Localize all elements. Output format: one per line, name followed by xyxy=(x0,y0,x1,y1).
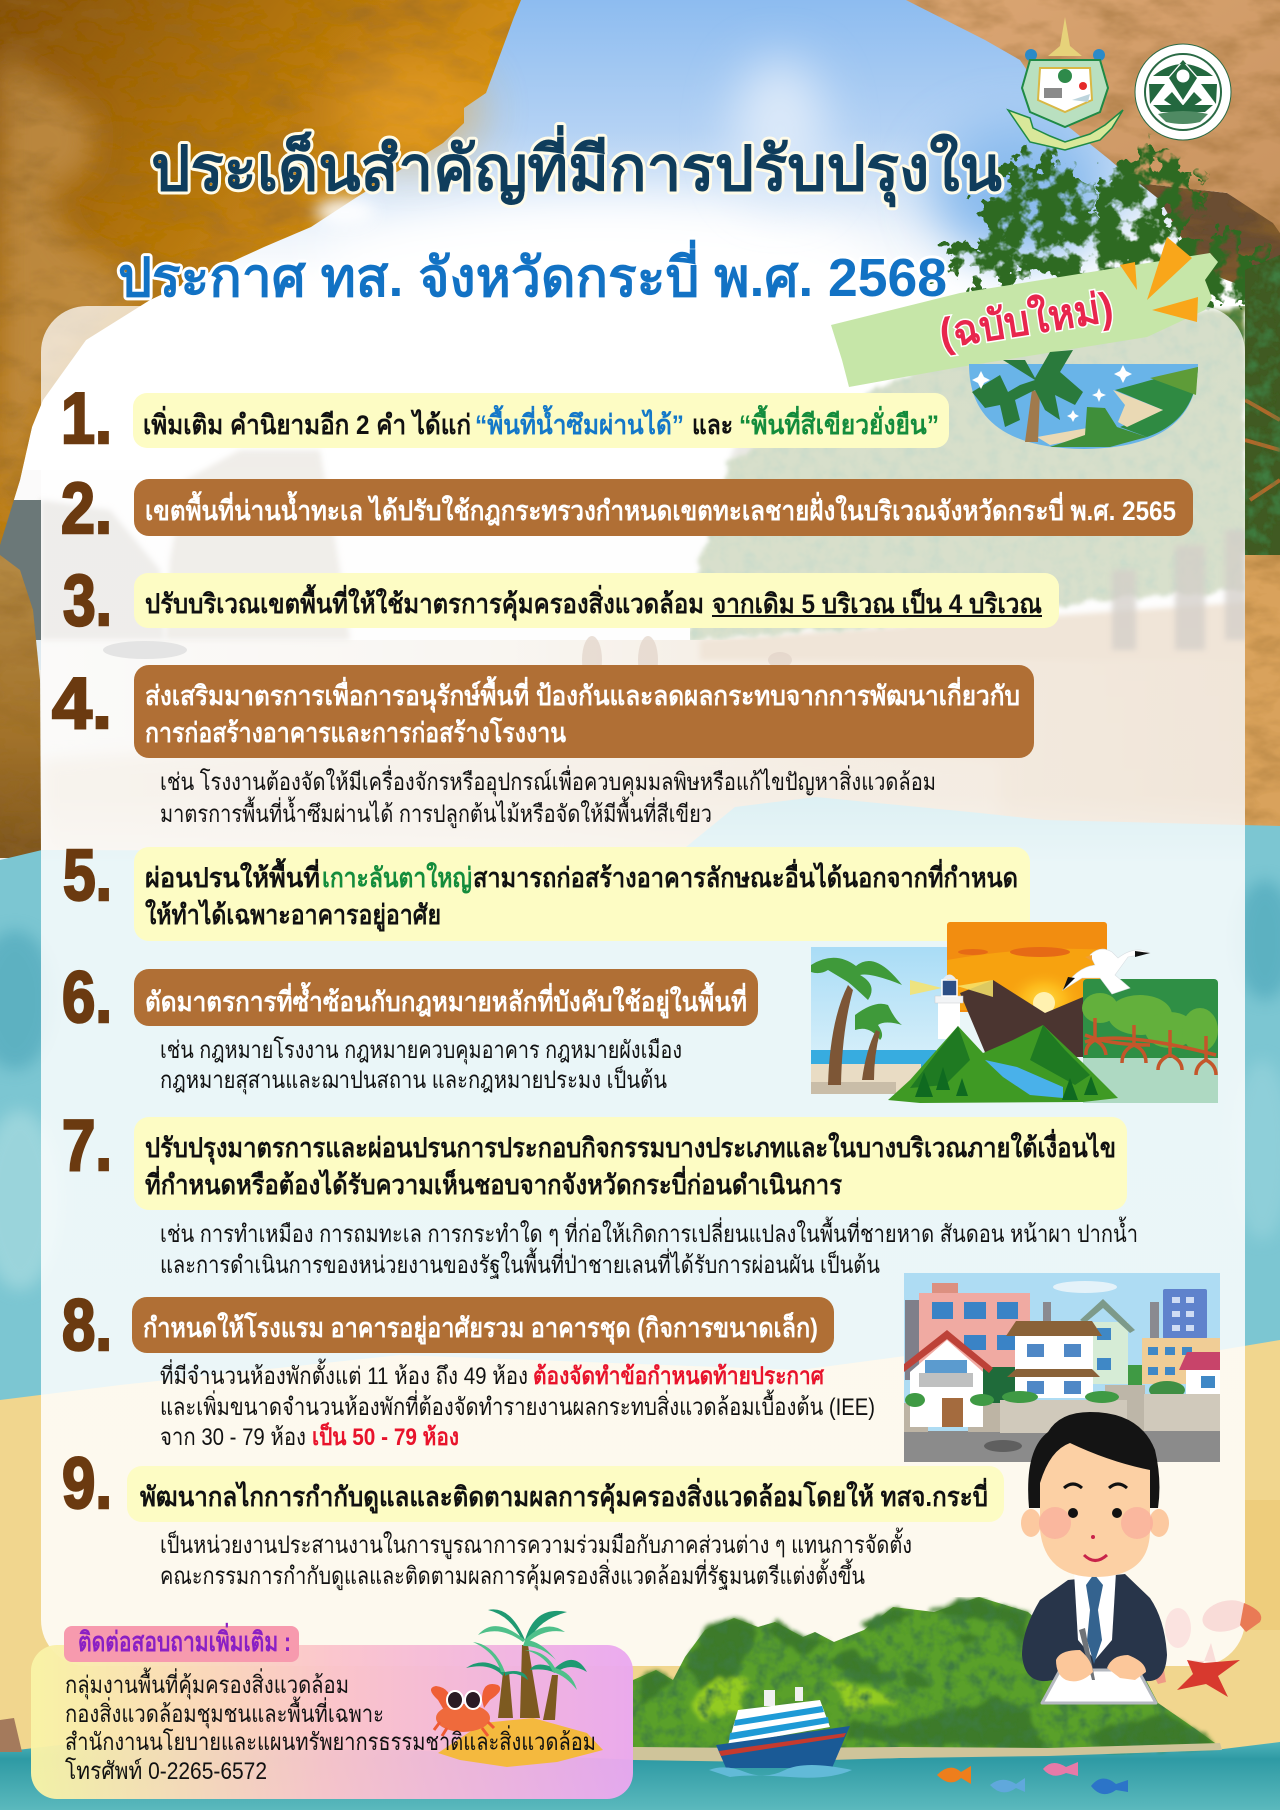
background: trees xyxy=(948,155,1270,305)
background: lower left rock xyxy=(0,555,41,858)
item 6: กฎหมายสุสานและฌาปนสถาน และกฎหมายประมง เป็นต้น xyxy=(160,1065,667,1095)
item 8: จาก 30 - 79 ห้อง xyxy=(160,1424,306,1451)
contact text xyxy=(65,1667,596,1785)
panel: main translucent card xyxy=(41,306,1245,1666)
item 5: เกาะลันตาใหญ่ xyxy=(322,862,472,894)
item 2: เขตพื้นที่น่านน้ำทะเล ได้ปรับใช้กฎกระทรวงกำหนดเขตทะเลชายฝั่งในบริเวณจังหวัดกระบี่ พ.ศ. 2565 xyxy=(145,490,1176,526)
item 5: สามารถก่อสร้างอาคารลักษณะอื่นได้นอกจากที่กำหนด xyxy=(473,858,1018,893)
contact heading: ติดต่อสอบถามเพิ่มเติม : xyxy=(78,1622,291,1657)
item 6 xyxy=(62,958,758,1095)
background: bottom sea xyxy=(0,1718,1280,1810)
illustration: green island xyxy=(633,1597,1220,1755)
item 3: ปรับบริเวณเขตพื้นที่ให้ใช้มาตรการคุ้มครองสิ่งแวดล้อม xyxy=(145,583,704,621)
item 1: “พื้นที่สีเขียวยั่งยืน” xyxy=(739,404,939,440)
item 4 xyxy=(52,664,1034,829)
background: sky and clouds xyxy=(0,0,1280,470)
ribbon label: (ฉบับใหม่) xyxy=(936,282,1116,357)
contact text: สำนักงานนโยบายและแผนทรัพยากรธรรมชาติและสิ่งแวดล้อม xyxy=(65,1725,596,1756)
item 1: 1. xyxy=(61,379,112,459)
item 6: เช่น กฎหมายโรงงาน กฎหมายควบคุมอาคาร กฎหมายผังเมือง xyxy=(160,1036,682,1065)
illustration: man writing xyxy=(1021,1412,1169,1703)
item 9: เป็นหน่วยงานประสานงานในการบูรณาการความร่วมมือกับภาคส่วนต่าง ๆ แทนการจัดตั้ง xyxy=(160,1527,912,1560)
item 8: ต้องจัดทำข้อกำหนดท้ายประกาศ xyxy=(533,1363,825,1390)
background: sunlit glow on rock xyxy=(315,60,480,226)
background: right rock overhang xyxy=(906,0,1280,233)
logo: department seal xyxy=(1135,44,1231,140)
title line 1: ประเด็นสำคัญที่มีการปรับปรุงใน xyxy=(151,125,1002,207)
item 4: 4. xyxy=(52,664,112,744)
item 1 xyxy=(61,379,949,459)
item 4: มาตรการพื้นที่น้ำซึมผ่านได้ การปลูกต้นไม้หรือจัดให้มีพื้นที่สีเขียว xyxy=(160,796,712,829)
item 1: “พื้นที่น้ำซึมผ่านได้” xyxy=(475,404,684,440)
illustration: island shore xyxy=(633,1743,1222,1762)
item 4: ส่งเสริมมาตรการเพื่อการอนุรักษ์พื้นที่ ป้องกันและลดผลกระทบจากการพัฒนาเกี่ยวกับ xyxy=(145,675,1020,713)
contact text: กองสิ่งแวดล้อมชุมชนและพื้นที่เฉพาะ xyxy=(65,1696,384,1729)
item 9: พัฒนากลไกการกำกับดูแลและติดตามผลการคุ้มครองสิ่งแวดล้อมโดยให้ ทสจ.กระบี่ xyxy=(140,1477,988,1514)
illustration: beach bowl xyxy=(969,350,1198,449)
illustration: town buildings xyxy=(904,1273,1220,1462)
item 7: และการดำเนินการของหน่วยงานของรัฐในพื้นที่ป่าชายเลนที่ได้รับการผ่อนผัน เป็นต้น xyxy=(160,1247,880,1279)
item 1: และ xyxy=(692,410,733,440)
item 8: ที่มีจำนวนห้องพักตั้งแต่ 11 ห้อง ถึง 49 ห้อง xyxy=(160,1358,528,1390)
item 5: ผ่อนปรนให้พื้นที่ xyxy=(145,857,320,893)
icon: orange sparks xyxy=(1120,237,1198,322)
background: left rock arch xyxy=(0,0,521,545)
title line 2: ประกาศ ทส. จังหวัดกระบี่ พ.ศ. 2568 xyxy=(118,239,947,308)
logo: provincial crest xyxy=(1008,17,1123,150)
item 7: ที่กำหนดหรือต้องได้รับความเห็นชอบจากจังหวัดกระบี่ก่อนดำเนินการ xyxy=(145,1165,842,1200)
item 7: ปรับปรุงมาตรการและผ่อนปรนการประกอบกิจกรรมบางประเภทและในบางบริเวณภายใต้เงื่อนไข xyxy=(145,1128,1116,1165)
contact text: โทรศัพท์ 0-2265-6572 xyxy=(65,1757,267,1785)
item 6: 6. xyxy=(62,958,112,1038)
item 7 xyxy=(62,1106,1138,1279)
background: right foliage strip xyxy=(1245,255,1280,560)
item 9: คณะกรรมการกำกับดูแลและติดตามผลการคุ้มครองสิ่งแวดล้อมที่รัฐมนตรีแต่งตั้งขึ้น xyxy=(160,1558,865,1591)
item 8: กำหนดให้โรงแรม อาคารอยู่อาศัยรวม อาคารชุด (กิจการขนาดเล็ก) xyxy=(143,1310,818,1345)
item 6: ตัดมาตรการที่ซ้ำซ้อนกับกฎหมายหลักที่บังคับใช้อยู่ในพื้นที่ xyxy=(145,981,747,1019)
item 5: 5. xyxy=(63,836,112,916)
panel: contact box xyxy=(31,1626,633,1799)
ribbon: new edition xyxy=(831,253,1218,387)
background: beach scene xyxy=(0,306,1280,900)
background: torn watercolor water xyxy=(0,797,1280,1400)
item 2: 2. xyxy=(61,469,112,549)
item 9: 9. xyxy=(62,1444,112,1524)
item 8: และเพิ่มขนาดจำนวนห้องพักที่ต้องจัดทำรายงานผลกระทบสิ่งแวดล้อมเบื้องต้น (IEE) xyxy=(160,1389,875,1421)
illustration: coast, lighthouse and mangrove xyxy=(811,922,1218,1103)
item 1: เพิ่มเติม คำนิยามอีก 2 คำ ได้แก่ xyxy=(143,405,471,440)
background: dark cliff behind trees xyxy=(1110,160,1280,300)
item 5 xyxy=(63,836,1030,941)
item 2 xyxy=(61,469,1193,549)
item 4: เช่น โรงงานต้องจัดให้มีเครื่องจักรหรืออุปกรณ์เพื่อควบคุมมลพิษหรือแก้ไขปัญหาสิ่งแวดล้อม xyxy=(160,765,936,797)
contact text: กลุ่มงานพื้นที่คุ้มครองสิ่งแวดล้อม xyxy=(65,1667,349,1700)
item 8: เป็น 50 - 79 ห้อง xyxy=(312,1422,459,1451)
item 5: ให้ทำได้เฉพาะอาคารอยู่อาศัย xyxy=(145,899,441,932)
icon: fish xyxy=(937,1762,1128,1794)
illustration: cruise ship xyxy=(709,1687,852,1778)
illustration: shells and starfish xyxy=(1152,1595,1261,1697)
item 8: 8. xyxy=(62,1286,112,1366)
item 3: 3. xyxy=(63,561,112,641)
background: sand strips xyxy=(0,555,1280,1760)
item 4: การก่อสร้างอาคารและการก่อสร้างโรงงาน xyxy=(145,716,566,748)
illustration: palm islet and crab xyxy=(431,1609,603,1767)
item 3 xyxy=(63,561,1059,641)
item 8 xyxy=(62,1286,875,1451)
item 9 xyxy=(62,1444,1004,1591)
contact heading pill xyxy=(64,1626,299,1662)
item 3: จากเดิม 5 บริเวณ เป็น 4 บริเวณ xyxy=(712,586,1042,619)
item 7: 7. xyxy=(62,1106,112,1186)
